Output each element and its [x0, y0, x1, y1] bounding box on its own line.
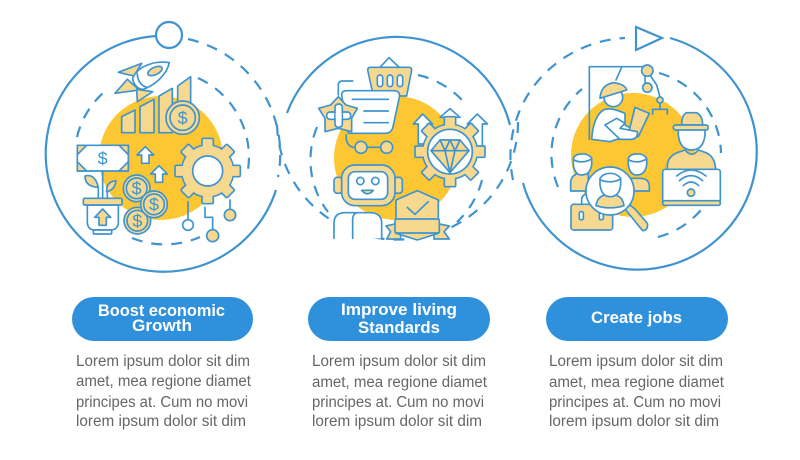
icon: worker with laptop	[663, 113, 720, 205]
icon: up arrows	[137, 147, 167, 182]
icon: money plant: $	[98, 148, 108, 168]
icon group: living standards	[319, 58, 487, 240]
body text 2: lorem ipsum dolor sit dim	[312, 413, 482, 430]
outer ring 2 dashed arc	[277, 122, 518, 240]
heading pill 3: Create jobs	[591, 308, 682, 327]
outer ring 2 solid arc	[287, 37, 510, 125]
panel: improve living standards	[277, 37, 518, 430]
outer ring 3 solid arc	[523, 38, 757, 270]
outer ring 1 dashed arc	[188, 39, 280, 177]
icon group: jobs	[571, 65, 720, 231]
yellow backdrop circle 3	[571, 93, 695, 217]
body text 1	[76, 353, 252, 430]
heading pill 1: Boost economic	[98, 301, 225, 320]
icon: team candidates	[571, 154, 649, 191]
body text 3: amet, mea regione diamet	[549, 374, 725, 391]
heading pill 2: Standards	[358, 318, 440, 337]
panel: create jobs	[510, 27, 757, 430]
outer ring 3 dashed arc	[510, 38, 625, 180]
icon: briefcase	[571, 193, 613, 230]
body text 3	[549, 353, 725, 430]
heading pill 1	[72, 297, 253, 341]
icon: engineer with robot arm	[589, 65, 667, 142]
icon: gear with circuit	[175, 138, 240, 242]
icon: rising bars: $	[178, 108, 188, 128]
icon: magnifier with candidate	[586, 167, 648, 231]
heading pill 2	[308, 297, 490, 341]
icon: rising bars	[122, 77, 199, 134]
yellow backdrop circle 1	[99, 96, 223, 220]
marker triangle	[636, 27, 662, 50]
heading pill 2: Improve living	[341, 300, 457, 319]
body text 1: lorem ipsum dolor sit dim	[76, 413, 246, 430]
icon: coins: $	[149, 195, 159, 215]
icon: robot	[334, 165, 402, 238]
body text 2: Lorem ipsum dolor sit dim	[312, 353, 486, 370]
icon: money plant	[77, 145, 128, 234]
body text 2	[312, 353, 488, 430]
icon: shopping cart with star	[319, 81, 400, 153]
body text 1: principes at. Cum no movi	[76, 394, 248, 411]
marker circle	[156, 22, 182, 48]
body text 2: amet, mea regione diamet	[312, 374, 488, 391]
panel: boost economic growth	[46, 22, 280, 430]
icon: rocket	[115, 62, 169, 102]
heading pill 1: Growth	[132, 316, 192, 335]
body text 1: Lorem ipsum dolor sit dim	[76, 353, 250, 370]
icon: gear with diamond and arrows	[413, 109, 487, 187]
inner dashed ring 1	[77, 78, 249, 244]
icon: shopping basket	[368, 58, 412, 96]
heading pill 3	[546, 297, 728, 341]
body text 3: Lorem ipsum dolor sit dim	[549, 353, 723, 370]
outer ring 1 solid arc	[46, 36, 276, 272]
body text 3: lorem ipsum dolor sit dim	[549, 413, 719, 430]
yellow backdrop circle 2	[334, 96, 458, 220]
icon: coins	[123, 175, 167, 234]
icon: coins: $	[132, 179, 142, 199]
inner dashed ring 2	[310, 75, 482, 222]
body text 3: principes at. Cum no movi	[549, 394, 721, 411]
body text 2: principes at. Cum no movi	[312, 394, 484, 411]
icon group: growth	[77, 62, 240, 242]
icon: coins: $	[132, 211, 142, 231]
inner dashed ring 3	[551, 73, 721, 237]
icon: quality badge	[386, 191, 449, 240]
body text 1: amet, mea regione diamet	[76, 373, 252, 390]
